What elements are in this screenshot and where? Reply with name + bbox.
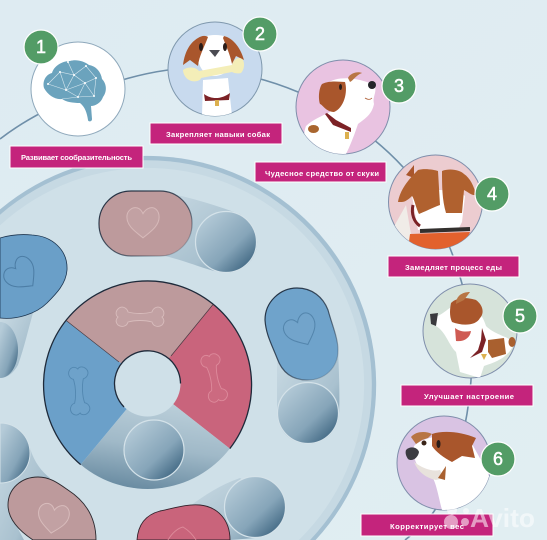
step 6: slim dog xyxy=(361,416,515,536)
sector: pink top xyxy=(66,281,213,384)
badge 6 xyxy=(481,442,515,476)
label 3: Чудесное средство от скуки xyxy=(265,169,379,178)
illustration: dog profile xyxy=(304,72,376,154)
label 1: Развивает сообразительность xyxy=(21,153,132,162)
badge 1: 1 xyxy=(36,37,46,57)
step 5: happy dog xyxy=(401,284,537,406)
badge 5: 5 xyxy=(515,306,525,326)
slot: bottom-left pink xyxy=(0,423,96,540)
hole edge xyxy=(115,351,180,407)
centre dial xyxy=(44,281,252,489)
label 2: Закрепляет навыки собак xyxy=(166,130,270,139)
illustration: dog with bone xyxy=(183,35,244,116)
label 5: Улучшает настроение xyxy=(424,392,514,401)
bone: blue xyxy=(68,367,90,415)
illustration: dog eating from bowl xyxy=(392,165,476,249)
badge 2: 2 xyxy=(255,24,265,44)
slot: left blue xyxy=(0,235,67,378)
illustration: dog head and chest xyxy=(406,432,491,510)
step 3: dog side view xyxy=(255,60,416,182)
label 3 xyxy=(255,162,386,182)
badge 3: 3 xyxy=(394,76,404,96)
puzzle disc xyxy=(0,156,376,540)
step 4: dog eating xyxy=(388,155,519,277)
centre hole xyxy=(114,350,180,416)
ring outline xyxy=(44,281,252,465)
badge 3 xyxy=(382,69,416,103)
watermark: Avito xyxy=(444,503,535,533)
label 4: Замедляет процесс еды xyxy=(405,263,502,272)
slot: bottom red xyxy=(137,476,286,540)
sector: open wedge xyxy=(81,384,230,489)
circle 1 xyxy=(31,42,125,136)
sector separators xyxy=(66,304,213,362)
slot: top pink xyxy=(99,191,257,273)
circle 4 xyxy=(388,155,482,249)
disc rim xyxy=(0,156,376,540)
bone: pink xyxy=(116,307,164,326)
circle 3 xyxy=(296,60,390,154)
watermark dots xyxy=(444,505,469,529)
circle 6 xyxy=(397,416,491,510)
well in wedge xyxy=(124,420,184,480)
label 6: Корректирует вес xyxy=(390,522,464,531)
step 2: dog with bone xyxy=(150,17,282,144)
badge 4: 4 xyxy=(487,184,497,204)
icon: brain xyxy=(44,60,106,121)
illustration: happy dog xyxy=(430,292,516,378)
watermark text: Avito xyxy=(470,503,535,533)
circle 5 xyxy=(423,284,517,378)
connecting timeline arc xyxy=(0,69,472,540)
sector: red right xyxy=(148,304,251,449)
label 6 xyxy=(361,514,493,536)
sector: blue left xyxy=(44,320,148,465)
badge 6: 6 xyxy=(493,449,503,469)
bone: red xyxy=(200,353,229,403)
slot: right blue xyxy=(265,288,339,444)
circle 2 xyxy=(168,22,262,116)
step 1: brain xyxy=(10,30,143,168)
